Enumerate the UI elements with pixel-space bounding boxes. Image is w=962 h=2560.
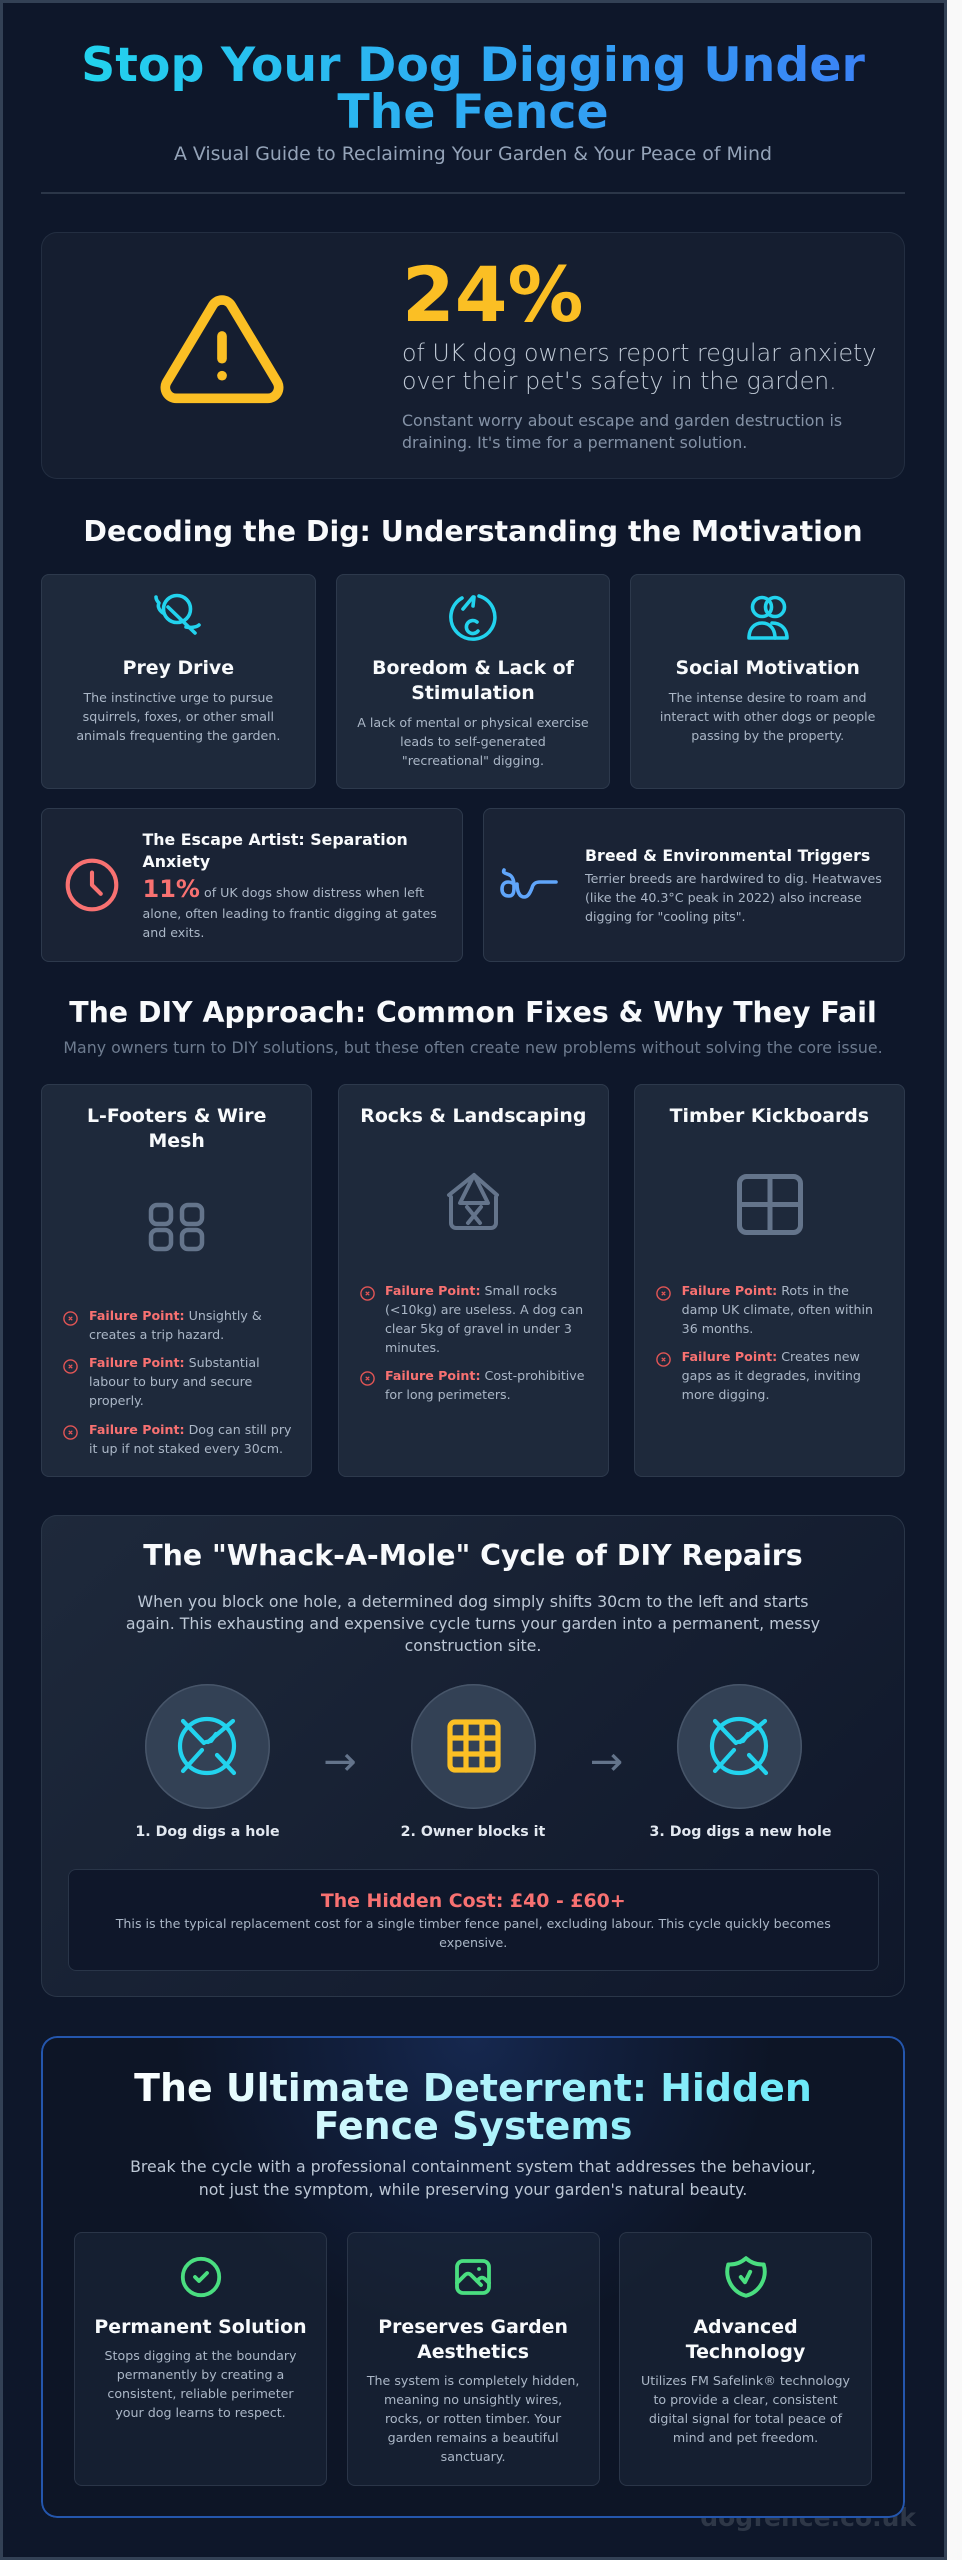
card text: A lack of mental or physical exercise: [357, 715, 589, 730]
card text: The instinctive urge to pursue: [83, 690, 273, 705]
card: L-footers: it up if not staked every 30cm.: [89, 1441, 283, 1456]
card text: alone, often leading to frantic digging at gates: [142, 906, 437, 921]
card text: rocks, or rotten timber. Your: [385, 2411, 561, 2426]
card title: Stimulation: [411, 682, 535, 704]
card: timber kickboards: Failure Point: Creates new: [682, 1349, 860, 1364]
card: prey drive: [41, 574, 316, 789]
heading: decoding the dig: Decoding the Dig: Understanding the Motivation: [83, 515, 863, 548]
card title: The Escape Artist: Separation: [142, 830, 408, 849]
icon: social: [747, 596, 789, 640]
card text: sanctuary.: [441, 2449, 506, 2464]
card: rocks and landscaping: for long perimeters.: [385, 1387, 511, 1402]
icon: check circle: [180, 2256, 222, 2298]
card text: The intense desire to roam and: [669, 690, 867, 705]
icon: boredom: [449, 594, 497, 641]
card title: Prey Drive: [123, 657, 234, 679]
card title: Advanced: [693, 2316, 798, 2338]
panel: hero statistic: [41, 232, 905, 478]
panel: whack-a-mole cycle: [41, 1515, 905, 1997]
watermark: dogfence.co.uk: [700, 2503, 916, 2532]
card title: Permanent Solution: [94, 2316, 307, 2338]
icon: rocks: [446, 1172, 500, 1230]
card: timber kickboards: 36 months.: [682, 1321, 753, 1336]
callout text: [116, 1916, 831, 1950]
card title: Anxiety: [142, 852, 210, 871]
callout: hidden cost: [68, 1869, 879, 1971]
panel text: [130, 2157, 816, 2198]
icon: timber panel: [737, 1174, 803, 1235]
card text: meaning no unsightly wires,: [384, 2392, 562, 2407]
card text: to provide a clear, consistent: [653, 2392, 838, 2407]
panel heading: [121, 2068, 825, 2146]
card text: [619, 2371, 872, 2447]
card: separation anxiety: [41, 808, 463, 962]
card: timber kickboards: Failure Point: Rots in the: [682, 1283, 849, 1298]
card text: [366, 2373, 579, 2464]
panel text: When you block one hole, a determined dog simply shifts 30cm to the left and starts: [137, 1592, 809, 1611]
statistic description: of UK dog owners report regular anxiety: [402, 339, 876, 367]
card text: and exits.: [142, 925, 204, 940]
card text: [142, 906, 437, 940]
card title: Social Motivation: [675, 657, 860, 679]
card text: your dog learns to respect.: [115, 2405, 286, 2420]
callout heading: The Hidden Cost: £40 - £60+: [321, 1890, 626, 1912]
card title: Technology: [686, 2341, 805, 2363]
card title: Boredom & Lack of: [372, 657, 574, 679]
card text: [76, 690, 280, 743]
supporting text: Constant worry about escape and garden destruction is: [402, 411, 842, 430]
supporting text: [402, 411, 842, 452]
card: permanent solution: [74, 2232, 327, 2486]
icon: wire mesh: [148, 1202, 204, 1252]
statistic: 24%: 24%: [402, 251, 583, 339]
card text: Terrier breeds are hardwired to dig. Heatwaves: [585, 871, 882, 886]
step 3: [650, 1684, 832, 1840]
card: L-footers: creates a trip hazard.: [89, 1327, 224, 1342]
failure point: [656, 1349, 861, 1402]
subheading: DIY approach: Many owners turn to DIY solutions, but these often create new problems without solving the core issue.: [63, 1038, 883, 1056]
card title: [372, 657, 574, 704]
card text: digging for "cooling pits".: [585, 909, 746, 924]
icon: garden picture: [455, 2259, 491, 2295]
icon: breed and environment: [500, 868, 558, 899]
failure point: [63, 1422, 291, 1456]
card title: L-Footers & Wire: [87, 1105, 266, 1127]
card: rocks and landscaping: Failure Point: Cost-prohibitive: [385, 1368, 585, 1383]
card title: Mesh: [148, 1130, 205, 1152]
failure point: [360, 1368, 585, 1402]
card text: mind and pet freedom.: [673, 2430, 818, 2445]
icon: new hole: [677, 1684, 802, 1808]
card title: Preserves Garden: [378, 2316, 568, 2338]
panel: ultimate deterrent: [41, 2036, 905, 2518]
card text: animals frequenting the garden.: [76, 728, 280, 743]
panel heading: The Ultimate Deterrent: Hidden: [134, 2066, 812, 2110]
card text: The system is completely hidden,: [367, 2373, 579, 2388]
panel text: construction site.: [405, 1636, 541, 1655]
card: L-footers: Failure Point: Unsightly &: [89, 1308, 262, 1323]
card: L-footers: labour to bury and secure: [89, 1374, 252, 1389]
card: timber kickboards: [634, 1084, 905, 1477]
card text: [105, 2348, 296, 2420]
card: rocks and landscaping: (<10kg) are useless. A dog can: [385, 1302, 583, 1317]
card: advanced technology: [619, 2232, 872, 2486]
card: rocks and landscaping: Failure Point: Small rocks: [385, 1283, 557, 1298]
card: L-footers: Failure Point: Substantial: [89, 1355, 260, 1370]
panel text: Break the cycle with a professional containment system that addresses the behaviour,: [130, 2157, 816, 2176]
panel text: not just the symptom, while preserving your garden's natural beauty.: [199, 2180, 747, 2198]
header: title block: [41, 38, 905, 194]
card: social motivation: [630, 574, 905, 789]
card: timber kickboards: damp UK climate, often within: [682, 1302, 873, 1317]
card: L-footers: Failure Point: Dog can still pry: [89, 1422, 291, 1437]
card text: interact with other dogs or people: [660, 709, 875, 724]
card: rocks and landscaping: [338, 1084, 609, 1477]
subtitle: A Visual Guide to Reclaiming Your Garden & Your Peace of Mind: [174, 143, 772, 165]
card text: permanently by creating a: [117, 2367, 284, 2382]
card: rocks and landscaping: minutes.: [385, 1340, 440, 1355]
card: preserves garden aesthetics: [347, 2232, 600, 2486]
card title: Timber Kickboards: [670, 1105, 869, 1127]
card text: passing by the property.: [691, 728, 844, 743]
failure point: [656, 1283, 873, 1336]
title: Stop Your Dog Digging Under: [81, 38, 865, 93]
statistic with text: 11% of UK dogs show distress when left: [142, 875, 424, 903]
card text: Stops digging at the boundary: [105, 2348, 296, 2363]
card title: [378, 2316, 568, 2363]
callout text: This is the typical replacement cost for a single timber fence panel, excluding labour. This cycle quickly becomes: [116, 1916, 831, 1931]
card: timber kickboards: gaps as it degrades, inviting: [682, 1368, 861, 1383]
card text: (like the 40.3°C peak in 2022) also increase: [585, 890, 862, 905]
card text: Utilizes FM Safelink® technology: [641, 2373, 850, 2388]
card text: squirrels, foxes, or other small: [83, 709, 274, 724]
step label: 1. Dog digs a hole: [135, 1824, 280, 1840]
card title: Rocks & Landscaping: [360, 1105, 586, 1127]
card text: digital signal for total peace of: [649, 2411, 842, 2426]
card text: [584, 871, 882, 924]
card text: leads to self-generated: [400, 734, 546, 749]
icon: blocked grid: [410, 1684, 536, 1808]
panel text: again. This exhausting and expensive cycle turns your garden into a permanent, messy: [126, 1614, 820, 1633]
statistic description: over their pet's safety in the garden.: [402, 367, 837, 395]
card text: "recreational" digging.: [402, 753, 544, 768]
step 1: [135, 1684, 280, 1840]
icon: clock: [66, 858, 118, 912]
card: rocks and landscaping: clear 5kg of gravel in under 3: [385, 1321, 572, 1336]
callout text: expensive.: [439, 1935, 507, 1950]
arrow: →: [323, 1739, 357, 1785]
icon: dig hole: [145, 1684, 270, 1808]
title: [80, 42, 866, 136]
icon: warning triangle: [160, 295, 284, 404]
card: breed triggers: [483, 808, 905, 962]
card text: [357, 715, 589, 768]
card title: Breed & Environmental Triggers: [585, 846, 870, 865]
failure point: [360, 1283, 583, 1355]
failure point: [63, 1308, 262, 1342]
panel text: [126, 1592, 820, 1655]
card title: [142, 830, 408, 871]
card title: [87, 1105, 266, 1152]
failure point: [63, 1355, 260, 1408]
supporting text: draining. It's time for a permanent solution.: [402, 433, 747, 452]
card: boredom: [336, 574, 610, 789]
title: The Fence: [337, 85, 609, 140]
icon: shield check: [725, 2256, 767, 2298]
card: L-footers: [41, 1084, 312, 1477]
card text: consistent, reliable perimeter: [107, 2386, 294, 2401]
panel heading: The "Whack-A-Mole" Cycle of DIY Repairs: [143, 1539, 803, 1572]
card text: garden remains a beautiful: [388, 2430, 559, 2445]
heading: DIY approach: The DIY Approach: Common Fixes & Why They Fail: [69, 996, 877, 1029]
step 2: [401, 1684, 545, 1840]
icon: prey: [154, 594, 201, 635]
card: L-footers: properly.: [89, 1393, 144, 1408]
card text: [660, 690, 875, 743]
arrow: →: [590, 1739, 623, 1785]
step label: 3. Dog digs a new hole: [650, 1824, 832, 1840]
step label: 2. Owner blocks it: [401, 1824, 545, 1840]
card: timber kickboards: more digging.: [682, 1387, 769, 1402]
statistic description: [402, 339, 876, 395]
card title: Aesthetics: [417, 2341, 529, 2363]
panel heading: Fence Systems: [314, 2104, 632, 2148]
card title: [619, 2315, 872, 2365]
